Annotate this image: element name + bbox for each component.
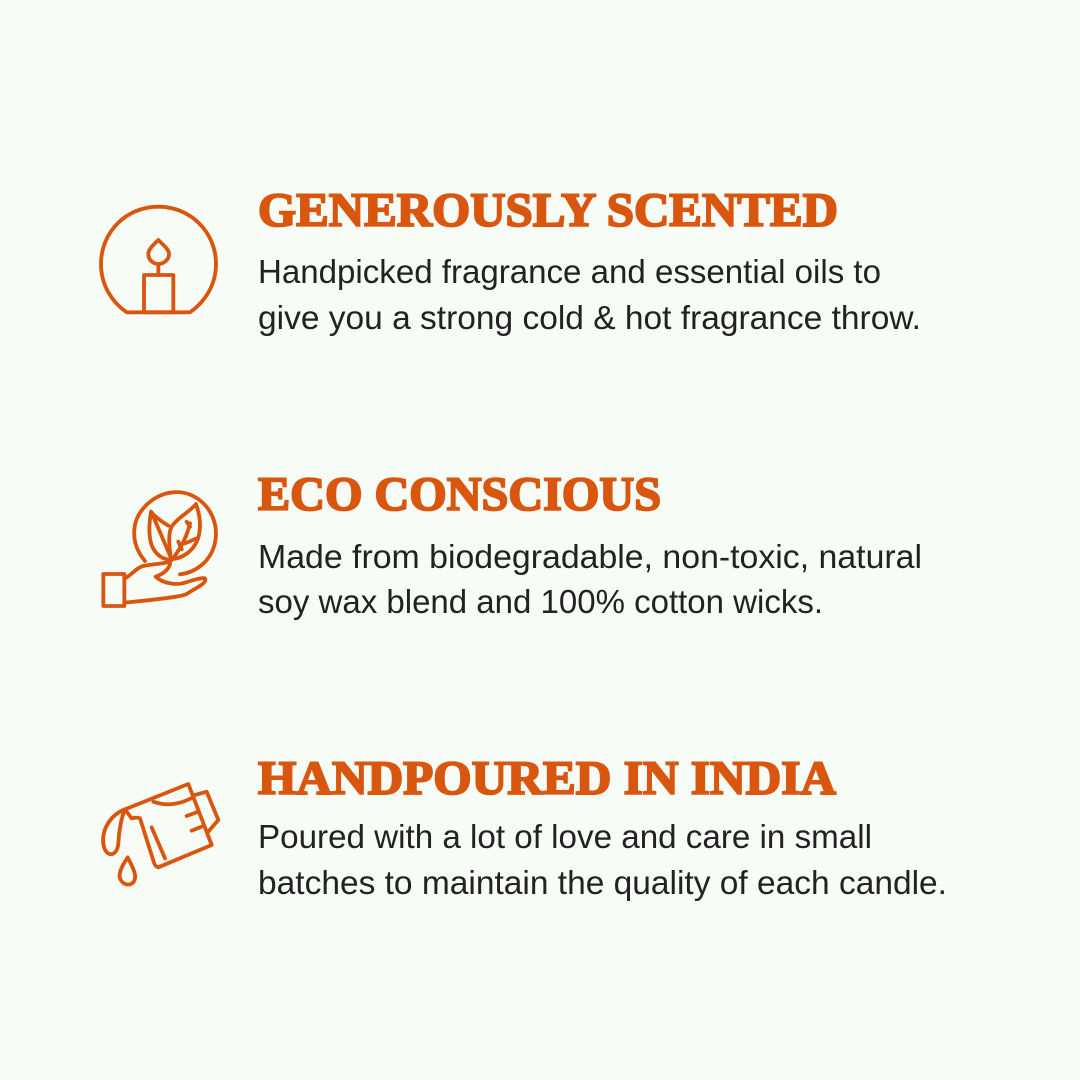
panel: eco conscious [103,468,922,620]
text: generously scented description: give you a strong cold & hot fragrance throw. [258,299,921,336]
text: handpoured in india description: Poured with a lot of love and care in small [258,818,872,855]
panel: generously scented [101,184,921,336]
text: eco conscious description: soy wax blend and 100% cotton wicks. [258,583,823,620]
text: generously scented description: Handpicked fragrance and essential oils to [258,253,881,290]
heading: handpoured in india: HANDPOURED IN INDIA [258,752,836,805]
icon: candle in dome [101,207,216,312]
heading: eco conscious: ECO CONSCIOUS [258,468,661,521]
icon: pouring jug [103,784,218,885]
icon: hand holding leaves [103,492,216,606]
panel: handpoured in india [103,752,947,901]
text: eco conscious description: Made from biodegradable, non-toxic, natural [258,538,922,575]
heading: generously scented: GENEROUSLY SCENTED [258,184,838,237]
text: handpoured in india description: batches to maintain the quality of each candle. [258,864,947,901]
